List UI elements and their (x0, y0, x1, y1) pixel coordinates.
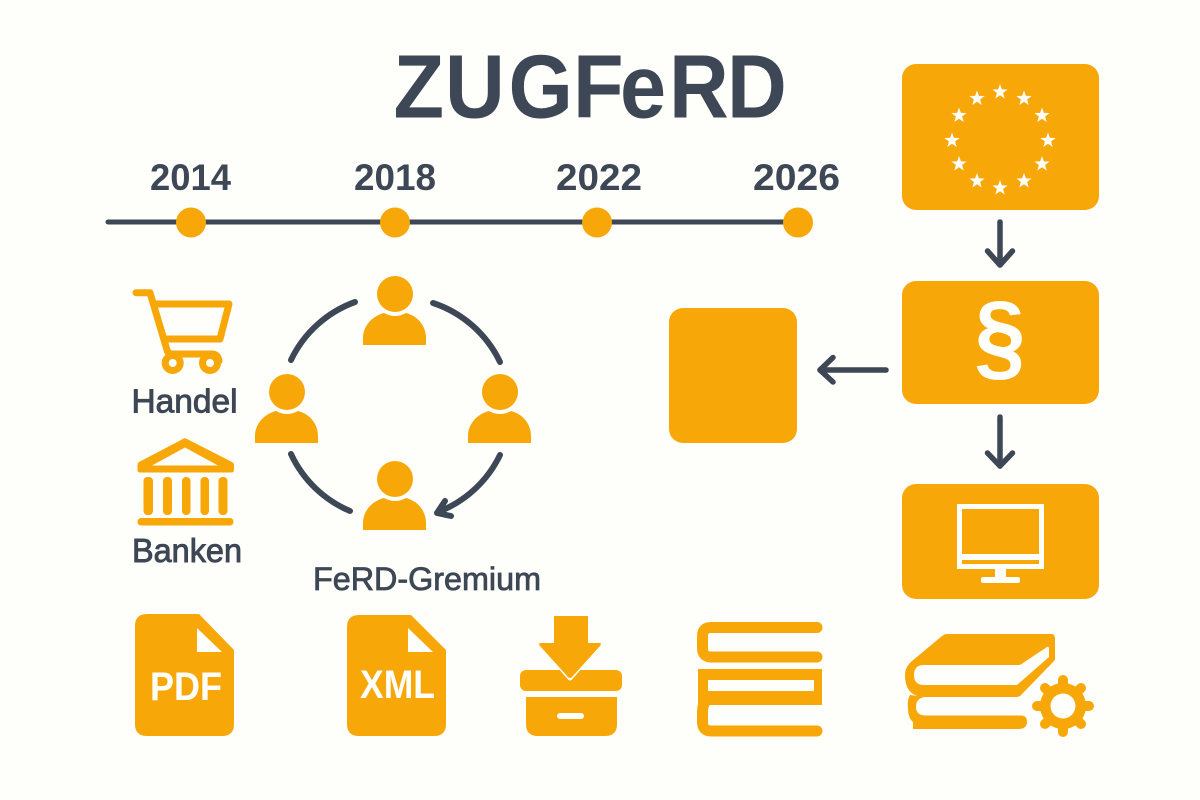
icon: XML document (347, 615, 446, 736)
timeline point 2014: 2014 (150, 157, 231, 198)
icon: monitor (957, 504, 1044, 583)
timeline point 2026: 2026 (753, 157, 840, 198)
timeline point 2018 (354, 157, 436, 238)
timeline point 2026 (753, 157, 840, 238)
arrow: EU to law (988, 222, 1012, 265)
icon: download into archive box (520, 616, 622, 736)
timeline point 2022: 2022 (556, 157, 642, 198)
arrow: law to blank box (820, 358, 886, 382)
icon: books with gear (905, 634, 1089, 732)
panel: blank box (669, 308, 797, 443)
timeline point 2022 (556, 157, 642, 238)
arrow: law to monitor (988, 417, 1012, 466)
person right (468, 374, 531, 443)
EU stars (944, 84, 1056, 194)
title: ZUGFeRD (393, 38, 787, 137)
cycle arcs (291, 302, 500, 516)
person bottom (363, 461, 426, 530)
panel: law paragraph (902, 281, 1099, 404)
icon: stack of books (698, 628, 822, 731)
icon: XML document: XML (360, 663, 435, 707)
timeline point 2018: 2018 (354, 157, 436, 198)
icon: PDF document (135, 614, 234, 736)
label: FeRD-Gremium: FeRD-Gremium (313, 561, 541, 597)
label: Banken: Banken (132, 532, 242, 569)
panel: law paragraph: § (974, 282, 1026, 391)
FeRD committee cycle (255, 276, 531, 530)
gear (1037, 680, 1089, 732)
timeline point 2014 (150, 157, 231, 238)
icon: bank building (138, 438, 234, 526)
person top (363, 276, 426, 345)
panel: computer monitor (902, 484, 1099, 599)
panel: EU flag (902, 64, 1099, 210)
label: Handel: Handel (132, 382, 238, 420)
timeline (108, 157, 840, 238)
icon: shopping cart (136, 293, 229, 370)
icon: PDF document: PDF (150, 665, 222, 709)
person left (255, 374, 318, 443)
